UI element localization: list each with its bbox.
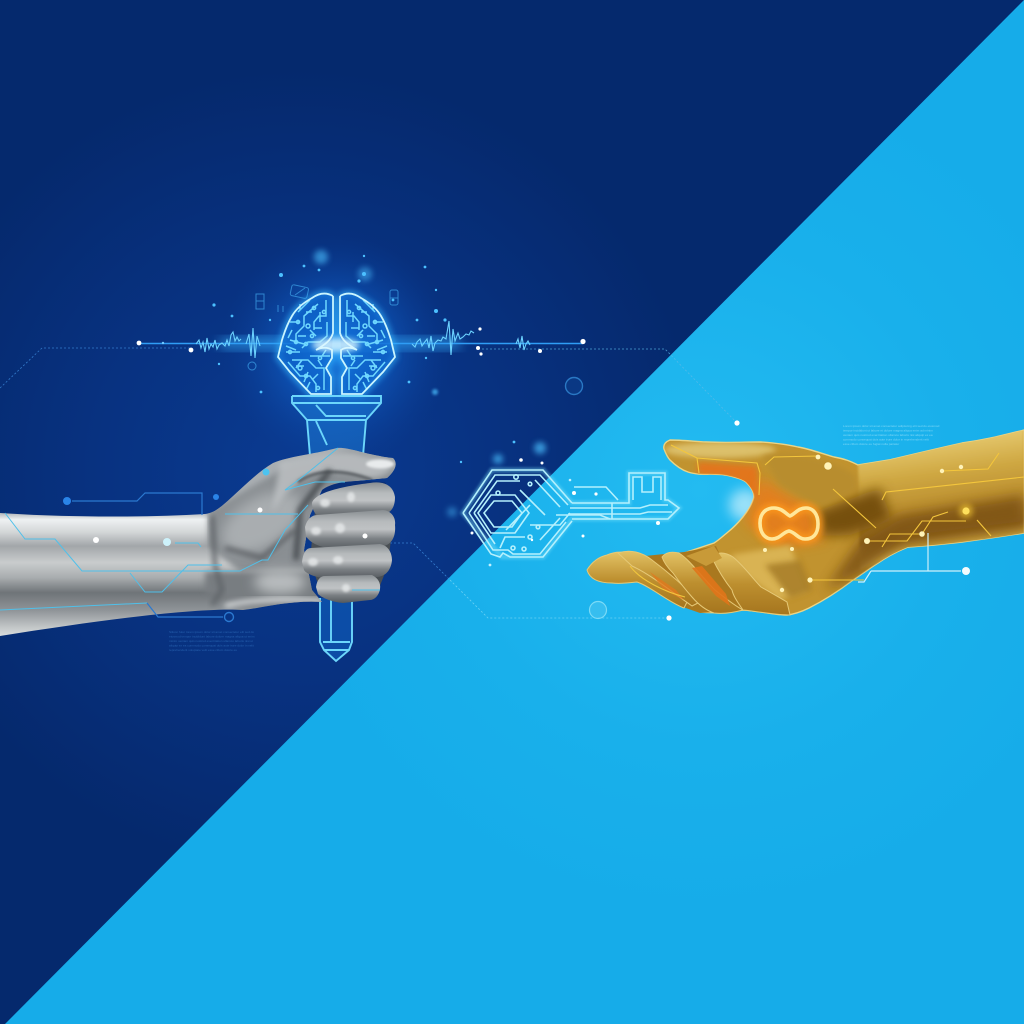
fine print: left caption: eiusmod tempor incididunt labore dolore magna aliqua ut enim — [169, 634, 255, 638]
golden arm and hand — [664, 428, 1024, 615]
fine print: left caption: minim veniam quis nostrud exercitation ullamco laboris nisi ut — [169, 639, 253, 643]
fine print: right caption: commodo consequat duis aute irure dolor in reprehenderit velit — [843, 438, 929, 442]
small holographic glyph icons near brain — [248, 284, 398, 370]
gap between thumb and fingers — [320, 481, 390, 505]
node dots on connector ends — [666, 420, 740, 621]
fine print: right caption: Lorem ipsum dolor sit amet consectetur adipiscing elit sed do eiusmod — [843, 424, 940, 428]
fine print: left caption: Silicon futur lorem ipsum dolor sit amet consectetur elit sed do — [169, 630, 254, 634]
fine print: left caption: aliquip ex ea commodo consequat duis aute irure dolor in velit — [169, 644, 254, 648]
waveform light beam — [139, 321, 583, 358]
glowing white nodes on silver hand — [93, 508, 368, 546]
translucent bubble on light side — [590, 602, 606, 618]
key satellite dots — [470, 458, 660, 566]
floating particles around brain — [212, 250, 546, 517]
golden circuit traces — [671, 445, 1024, 580]
torch: holographic handle — [292, 396, 381, 661]
circuit key icon — [463, 470, 679, 557]
fine print: right caption: tempor incididunt ut labore et dolore magna aliqua enim ad minim — [843, 428, 933, 432]
dotted connector lines — [0, 348, 737, 618]
circuit brain icon — [278, 294, 395, 394]
fine print: left caption: reprehenderit voluptate velit esse cillum dolore eu — [169, 648, 237, 652]
arm circuit traces — [0, 448, 380, 610]
dark-side circuit traces with nodes — [63, 468, 270, 622]
fine print: right caption: esse cillum dolore eu fugiat nulla pariatur — [843, 442, 899, 446]
pale connector and end node — [858, 533, 970, 582]
bubble ring — [566, 378, 582, 394]
glow behind palm — [729, 489, 761, 521]
glow behind brain — [221, 235, 451, 465]
glowing nodes on golden hand — [763, 455, 973, 592]
silver fist fingers — [302, 482, 395, 603]
fine print: right caption — [843, 424, 940, 446]
fine print: right caption: veniam quis nostrud exercitation ullamco laboris nisi aliquip ex ea — [843, 433, 933, 437]
golden fingers — [587, 546, 790, 615]
infinity symbol glowing on palm — [760, 508, 818, 539]
silver arm and hand — [0, 448, 396, 636]
waveform end dots — [137, 327, 586, 356]
fine print: left caption — [169, 630, 255, 652]
